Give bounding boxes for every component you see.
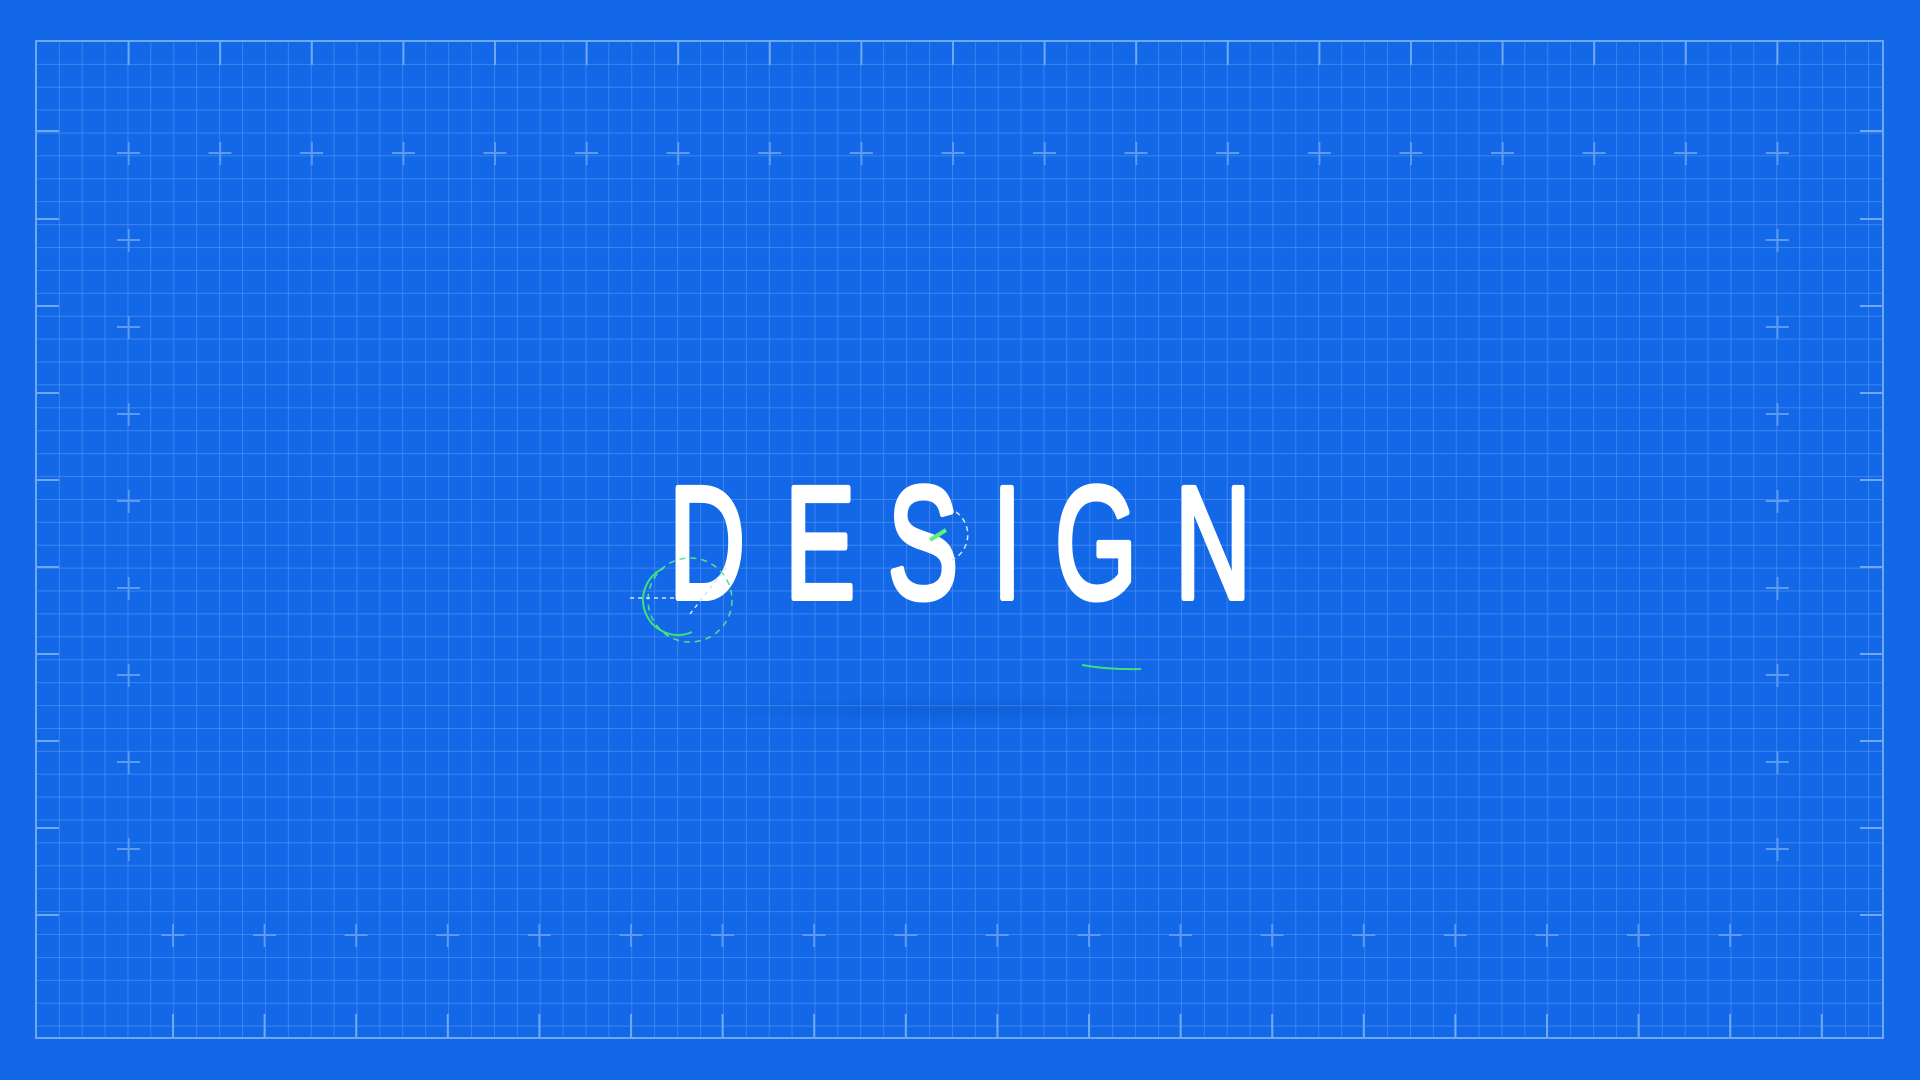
- title: DESIGN: [669, 453, 1251, 632]
- title: DESIGN: I: [992, 453, 1022, 632]
- title: DESIGN: S: [888, 453, 958, 632]
- title: DESIGN: D: [669, 453, 745, 632]
- text shadow: [700, 696, 1220, 724]
- title: DESIGN: E: [785, 453, 855, 632]
- construction marks: [630, 512, 1141, 669]
- plus markers: [117, 142, 1789, 947]
- title: DESIGN: G: [1055, 453, 1137, 632]
- title: DESIGN: N: [1175, 453, 1251, 632]
